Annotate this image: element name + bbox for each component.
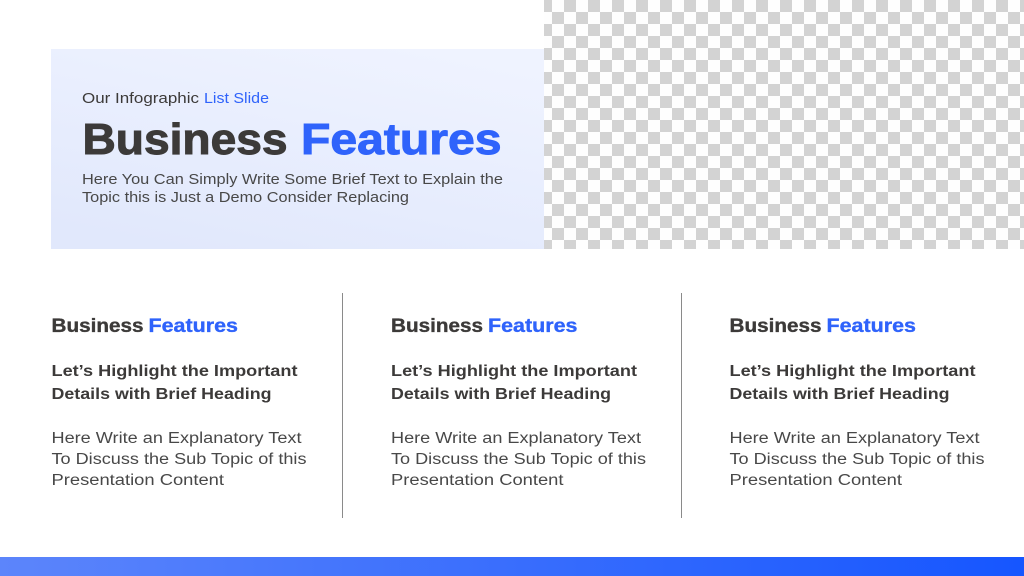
- column 1 heading: Features: [148, 316, 238, 337]
- intro text: [82, 172, 503, 206]
- column 2 heading: [391, 316, 578, 337]
- title: [82, 116, 502, 164]
- column 2 subheading: [391, 363, 637, 403]
- column 3 heading: Business: [730, 316, 822, 337]
- column 2 heading: Business: [391, 316, 483, 337]
- column 1 body: Presentation Content: [52, 472, 225, 489]
- column 3 heading: Features: [826, 316, 916, 337]
- column 3 body: Presentation Content: [730, 472, 903, 489]
- column 1: [52, 316, 307, 489]
- intro text: Topic this is Just a Demo Consider Replacing: [82, 190, 409, 206]
- column 3 body: [730, 430, 985, 489]
- column 2: [391, 316, 646, 489]
- column 2 body: To Discuss the Sub Topic of this: [391, 451, 646, 468]
- column 2 subheading: Details with Brief Heading: [391, 386, 611, 403]
- column 3: [730, 316, 985, 489]
- column 3 subheading: Details with Brief Heading: [730, 386, 950, 403]
- column 1 heading: [52, 316, 238, 337]
- column 2 body: Presentation Content: [391, 472, 564, 489]
- title: Business: [82, 116, 288, 164]
- column 2 body: [391, 430, 646, 489]
- column 2 body: Here Write an Explanatory Text: [391, 430, 642, 447]
- column 3 body: Here Write an Explanatory Text: [730, 430, 980, 447]
- eyebrow heading: Our Infographic: [82, 91, 199, 107]
- column 1 subheading: Details with Brief Heading: [52, 386, 272, 403]
- column 3 subheading: [730, 363, 976, 403]
- column 3 subheading: Let’s Highlight the Important: [730, 363, 976, 380]
- title: Features: [301, 116, 502, 164]
- column 2 heading: Features: [488, 316, 578, 337]
- column 1 subheading: Let’s Highlight the Important: [52, 363, 298, 380]
- column 1 subheading: [52, 363, 298, 403]
- column 1 body: Here Write an Explanatory Text: [52, 430, 302, 447]
- column 3 body: To Discuss the Sub Topic of this: [730, 451, 985, 468]
- column 1 body: [52, 430, 307, 489]
- column 1 heading: Business: [52, 316, 144, 337]
- image placeholder: checkerboard: [544, 0, 1024, 249]
- eyebrow heading: List Slide: [204, 91, 269, 107]
- column 1 body: To Discuss the Sub Topic of this: [52, 451, 307, 468]
- panel: title block: [51, 49, 544, 249]
- column 3 heading: [730, 316, 916, 337]
- footer bar: [0, 557, 1024, 576]
- column 2 subheading: Let’s Highlight the Important: [391, 363, 637, 380]
- eyebrow heading: [82, 91, 269, 107]
- intro text: Here You Can Simply Write Some Brief Text to Explain the: [82, 172, 503, 188]
